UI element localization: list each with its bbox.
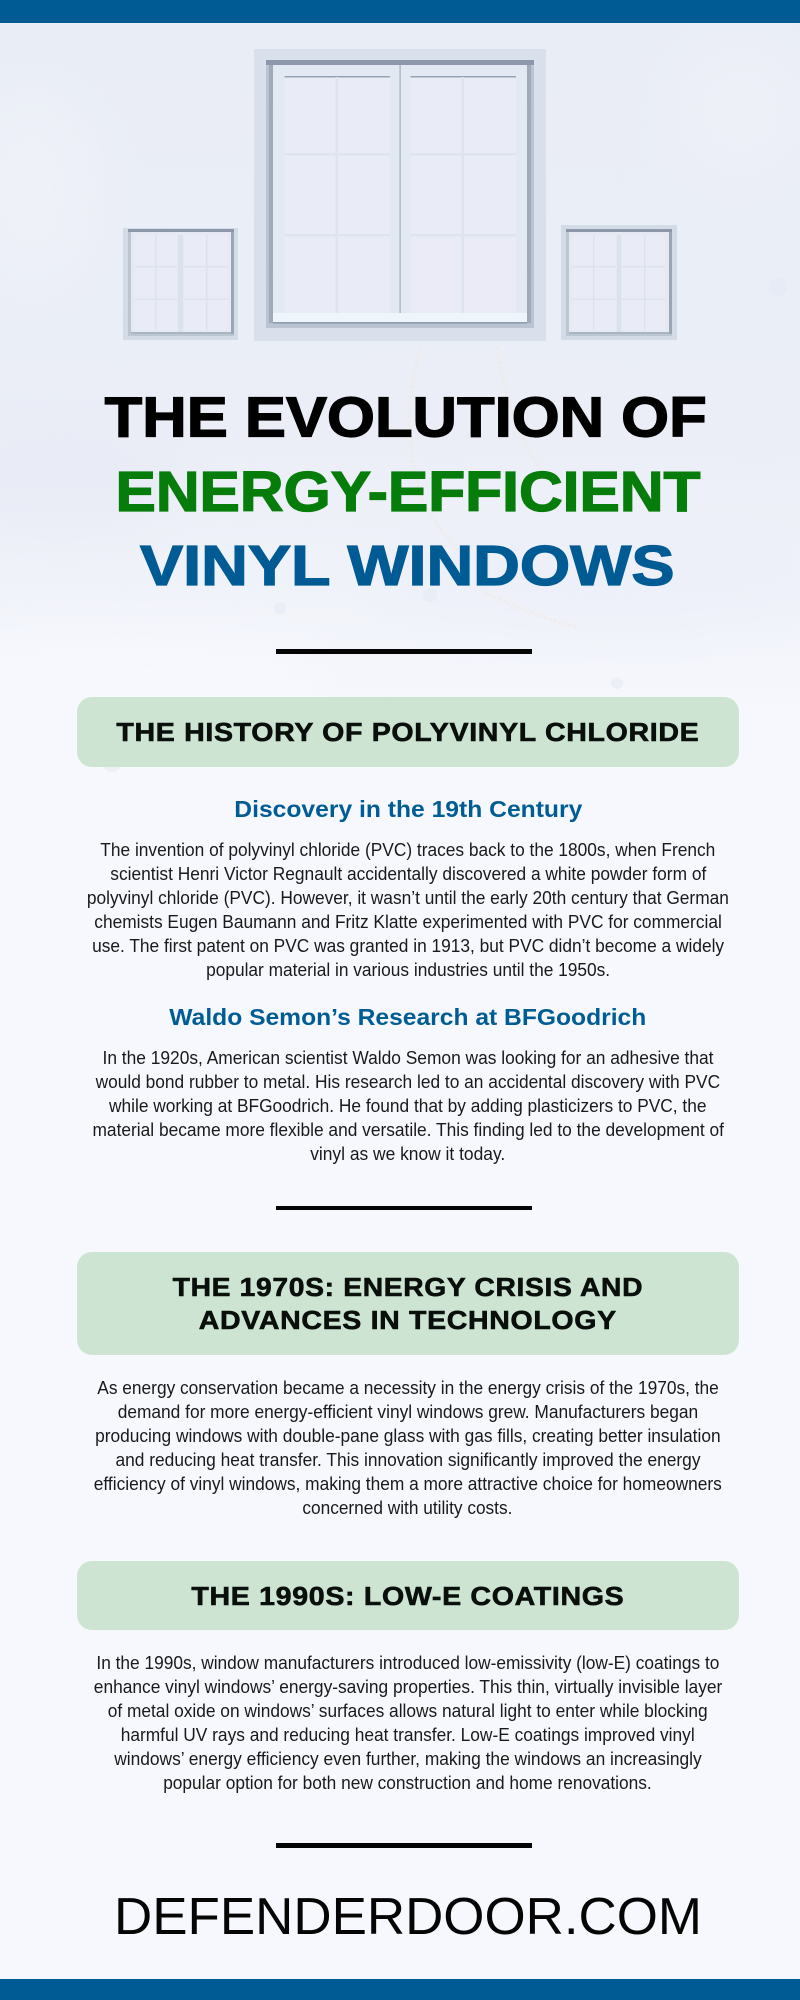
icon: large window (254, 49, 546, 341)
text block: discovery: use. The first patent on PVC was granted in 1913, but PVC didn’t become a widely (92, 935, 725, 956)
text block: 1990s: of metal oxide on windows’ surfaces allows natural light to enter while blocking (108, 1700, 708, 1721)
text block: 1970s: As energy conservation became a necessity in the energy crisis of the 1970s, the (97, 1377, 719, 1398)
icon: small right window (561, 225, 677, 340)
text block: discovery: chemists Eugen Baumann and Fritz Klatte experimented with PVC for commercial (94, 911, 722, 932)
text block: 1970s: efficiency of vinyl windows, making them a more attractive choice for homeowners (94, 1473, 722, 1494)
panel: the history of polyvinyl chloride heading (77, 697, 739, 767)
text block: 1970s: concerned with utility costs. (302, 1497, 512, 1518)
text block: waldo semon (92, 1047, 725, 1164)
title: ENERGY-EFFICIENT (116, 460, 700, 523)
text block: 1970s (94, 1377, 722, 1518)
text block: 1990s: enhance vinyl windows’ energy-saving properties. This thin, virtually invisible layer (94, 1676, 722, 1697)
text block: waldo semon: vinyl as we know it today. (310, 1143, 505, 1164)
title: VINYL WINDOWS (140, 534, 674, 597)
text block: 1970s: producing windows with double-pane glass with gas fills, creating better insulation (95, 1425, 721, 1446)
text block: waldo semon: In the 1920s, American scientist Waldo Semon was looking for an adhesive that (102, 1047, 714, 1068)
text block: 1970s: demand for more energy-efficient vinyl windows grew. Manufacturers began (118, 1401, 698, 1422)
text block: discovery: polyvinyl chloride (PVC). However, it wasn’t until the early 20th century that German (87, 887, 729, 908)
panel: the 1970s heading: THE 1970S: ENERGY CRISIS AND (173, 1272, 643, 1302)
text block: 1990s: windows’ energy efficiency even further, making the windows an increasingly (113, 1748, 702, 1769)
panel: the 1970s heading: ADVANCES IN TECHNOLOGY (199, 1305, 617, 1335)
title: THE EVOLUTION OF (105, 386, 707, 448)
text block: 1990s: popular option for both new construction and home renovations. (163, 1772, 652, 1793)
text block: discovery: scientist Henri Victor Regnault accidentally discovered a white powder form of (110, 863, 707, 884)
text block: discovery: popular material in various industries until the 1950s. (206, 959, 610, 980)
bottom bar (0, 1979, 800, 2000)
text block: 1970s: and reducing heat transfer. This innovation significantly improved the energy (116, 1449, 701, 1470)
panel: the 1990s heading: THE 1990S: LOW-E COATINGS (191, 1581, 624, 1611)
subheading: waldo semon's research: Waldo Semon’s Research at BFGoodrich (169, 1004, 646, 1030)
title (105, 386, 707, 597)
panel: the 1990s heading (77, 1561, 739, 1630)
top bar (0, 0, 800, 23)
icon: small left window (123, 228, 238, 340)
panel: the 1970s heading (77, 1252, 739, 1355)
text block: discovery (87, 839, 729, 980)
text block: waldo semon: would bond rubber to metal. His research led to an accidental discovery with PVC (95, 1071, 720, 1092)
subheading: discovery in the 19th century: Discovery in the 19th Century (234, 796, 583, 822)
text block: 1990s: harmful UV rays and reducing heat transfer. Low-E coatings improved vinyl (121, 1724, 695, 1745)
text block: waldo semon: material became more flexible and versatile. This finding led to the development of (92, 1119, 725, 1140)
footer: website: DEFENDERDOOR.COM (114, 1888, 702, 1946)
panel: the history of polyvinyl chloride heading: THE HISTORY OF POLYVINYL CHLORIDE (116, 717, 699, 747)
text block: 1990s: In the 1990s, window manufacturers introduced low-emissivity (low-E) coatings to (96, 1652, 719, 1673)
text block: waldo semon: while working at BFGoodrich. He found that by adding plasticizers to PVC, the (108, 1095, 706, 1116)
text block: discovery: The invention of polyvinyl chloride (PVC) traces back to the 1800s, when French (100, 839, 715, 860)
text block: 1990s (94, 1652, 722, 1793)
